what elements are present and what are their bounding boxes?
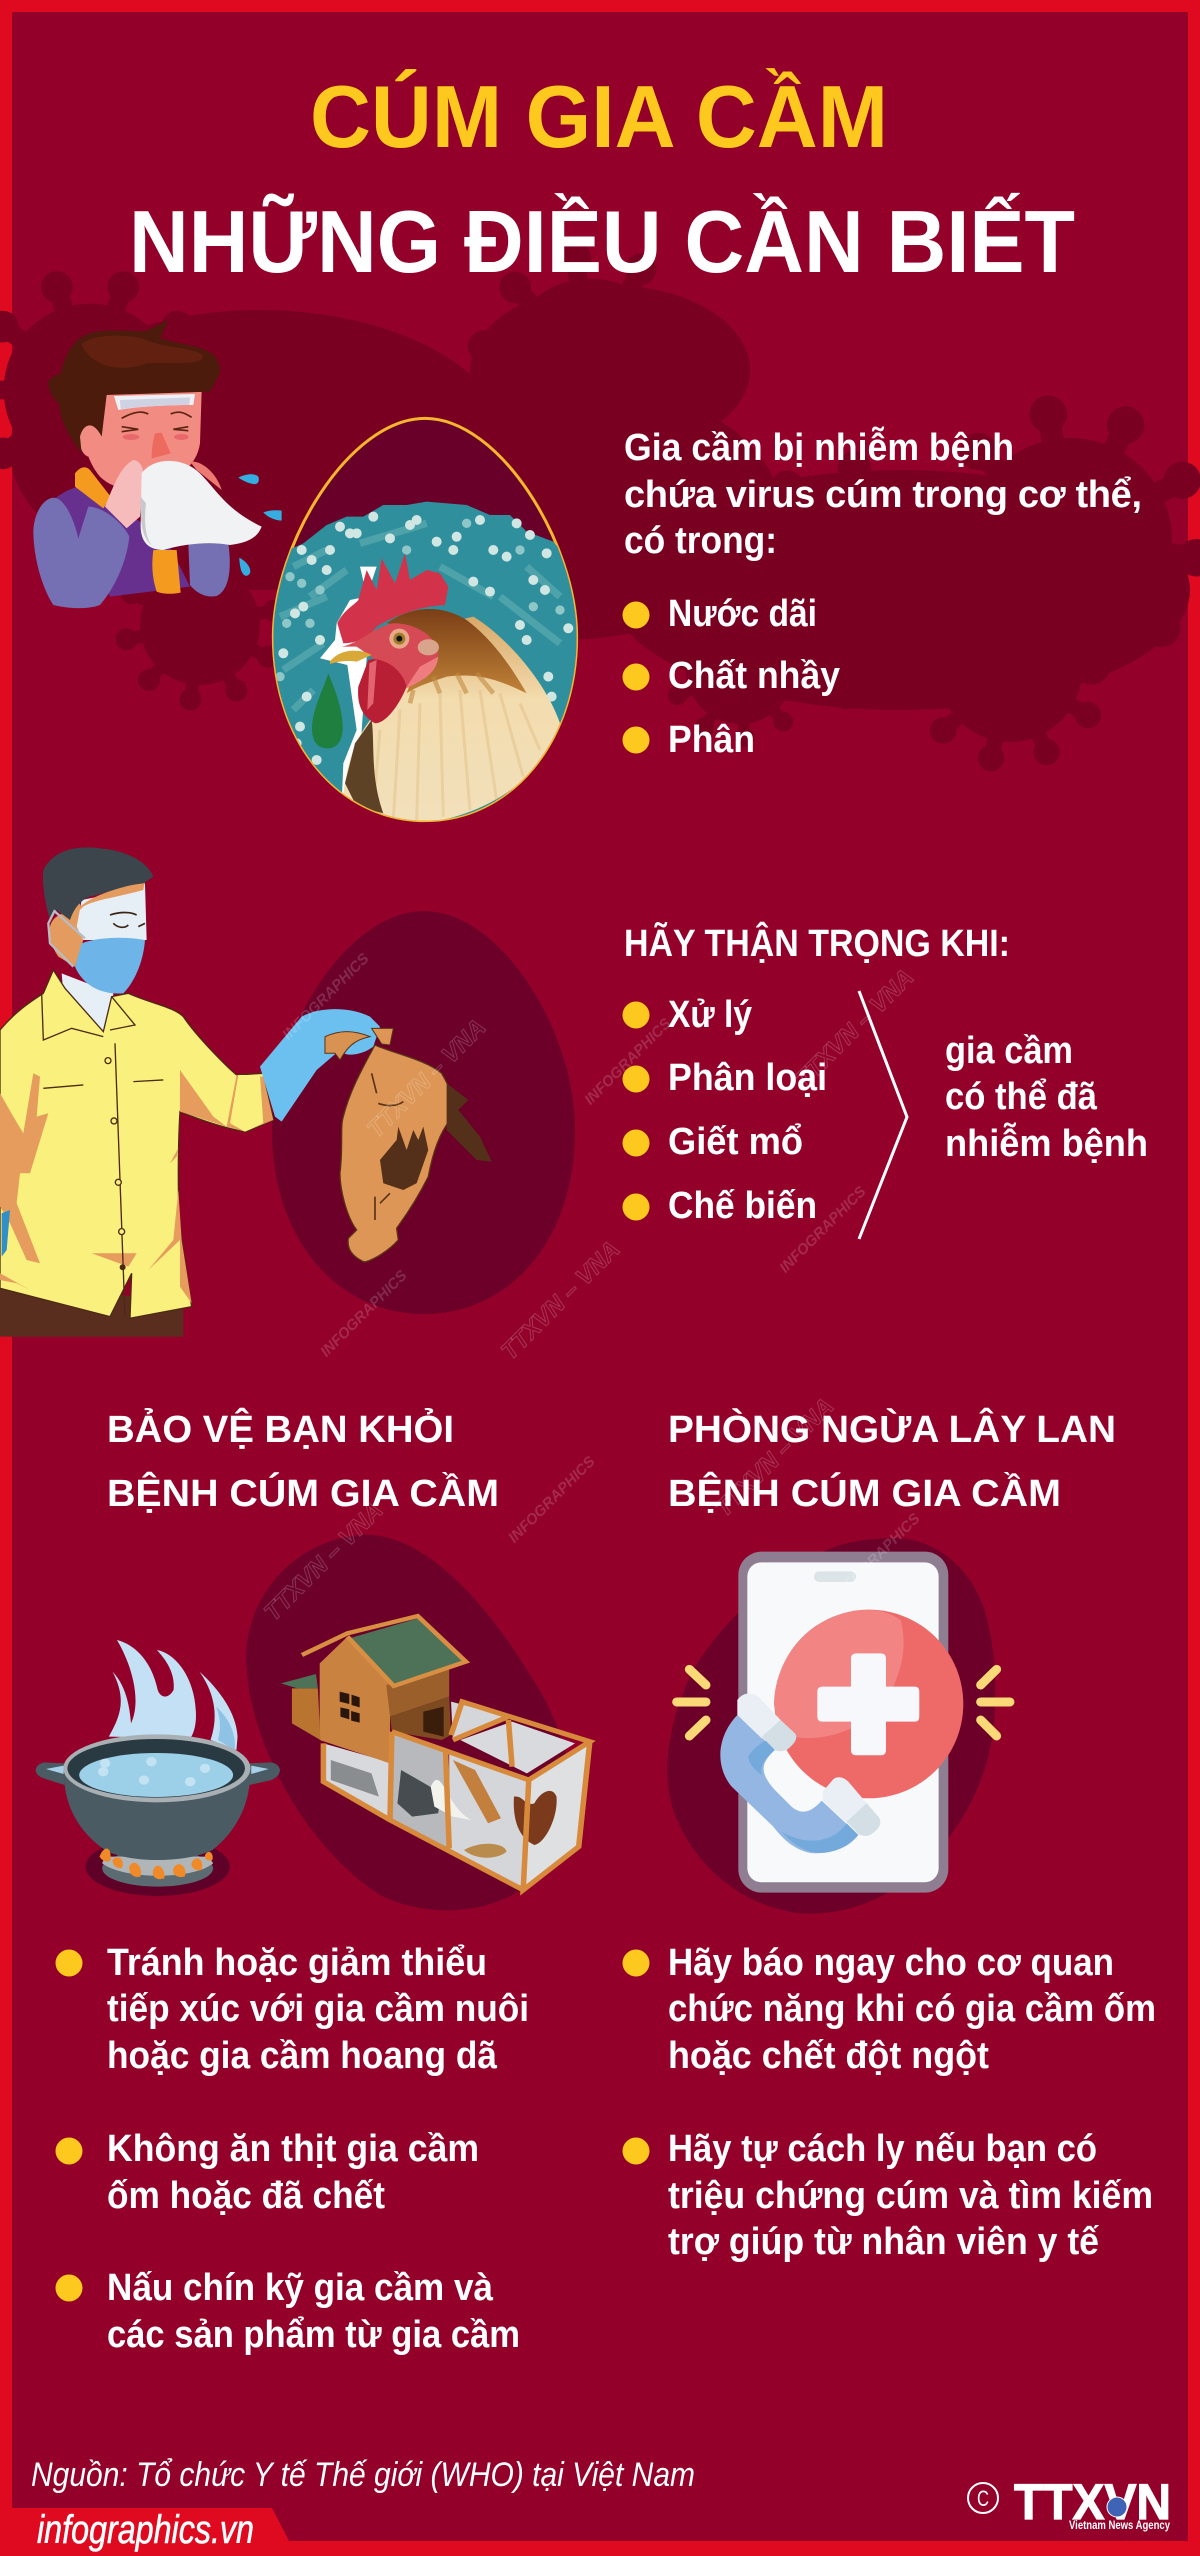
heading: prevent spread: BỆNH CÚM GIA CẦM <box>668 1471 1061 1515</box>
icon: chicken coop <box>281 1616 590 1890</box>
bullets <box>622 1002 650 1028</box>
egg backdrop and phone icon <box>667 1538 1010 1914</box>
watermarks: TTXVN – VNA <box>259 1497 388 1626</box>
panel: infected chicken in egg <box>270 418 585 823</box>
rooster photo illustration <box>270 502 585 823</box>
watermarks: INFOGRAPHICS <box>279 950 372 1043</box>
watermarks: TTXVN – VNA <box>790 964 919 1093</box>
background virus pattern <box>0 245 1200 789</box>
list: prevent spread: triệu chứng cúm và tìm kiếm <box>668 2175 1153 2217</box>
text block: infected poultry: Nước dãi <box>668 593 817 635</box>
watermarks <box>259 950 923 1626</box>
heading: protect yourself: BẢO VỆ BẠN KHỎI <box>107 1407 454 1451</box>
list: prevent spread: Hãy báo ngay cho cơ quan <box>668 1942 1114 1984</box>
globe <box>1107 2497 1127 2517</box>
watermarks: INFOGRAPHICS <box>581 1015 674 1108</box>
list: prevent spread: chức năng khi có gia cầm ốm <box>668 1988 1156 2030</box>
heading: prevent spread: PHÒNG NGỪA LÂY LAN <box>668 1407 1116 1451</box>
watermarks: INFOGRAPHICS <box>317 1267 410 1360</box>
list: protect yourself: hoặc gia cầm hoang dã <box>107 2035 498 2077</box>
list: protect yourself: các sản phẩm từ gia cầm <box>107 2314 520 2356</box>
text block: caution: Xử lý <box>668 994 752 1036</box>
bullets <box>622 602 650 628</box>
heading: protect yourself <box>107 1407 499 1515</box>
text block: caution <box>622 921 1148 1239</box>
egg outline <box>273 418 577 821</box>
list: prevent spread: trợ giúp từ nhân viên y tế <box>668 2221 1100 2263</box>
list: protect yourself <box>56 1942 529 2356</box>
list: protect yourself: Nấu chín kỹ gia cầm và <box>107 2267 494 2309</box>
text block: caution: Phân loại <box>668 1057 827 1099</box>
watermarks: INFOGRAPHICS <box>776 1183 869 1276</box>
source note: Nguồn: Tổ chức Y tế Thế giới (WHO) tại Việt Nam <box>31 2456 695 2494</box>
list: prevent spread <box>622 1942 1156 2263</box>
text block: infected poultry <box>622 425 1142 761</box>
title line 2: NHỮNG ĐIỀU CẦN BIẾT <box>129 192 1075 291</box>
list: protect yourself: ốm hoặc đã chết <box>107 2175 385 2217</box>
wordmark: TTXVN <box>1014 2474 1171 2530</box>
egg backdrop: caution section <box>272 911 575 1314</box>
text block: infected poultry: Chất nhầy <box>668 655 840 697</box>
logo: TTXVN <box>968 2474 1171 2532</box>
list: protect yourself: Tránh hoặc giảm thiểu <box>107 1942 487 1984</box>
text block: infected poultry: có trong: <box>624 520 777 562</box>
intro text: Gia cầm bị nhiễm bệnh <box>624 425 1014 469</box>
list: protect yourself: tiếp xúc với gia cầm nuôi <box>107 1988 529 2030</box>
logo: TTXVN: C <box>977 2486 989 2511</box>
heading: prevent spread <box>668 1407 1116 1515</box>
heading: HÃY THẬN TRỌNG KHI: <box>624 921 1010 965</box>
list: prevent spread: Hãy tự cách ly nếu bạn có <box>668 2128 1097 2170</box>
chevron <box>859 991 907 1239</box>
title <box>129 67 1075 291</box>
watermarks: TTXVN – VNA <box>496 1236 625 1365</box>
list: protect yourself: Không ăn thịt gia cầm <box>107 2128 479 2170</box>
watermarks: TTXVN – VNA <box>710 1393 839 1522</box>
text block: caution: Giết mổ <box>668 1121 803 1163</box>
icon: man in mask holding dead chicken <box>0 847 492 1337</box>
title line 1: CÚM GIA CẦM <box>310 67 888 166</box>
watermarks: TTXVN – VNA <box>362 1014 491 1143</box>
icon: handset <box>720 1694 880 1853</box>
text block: caution: có thể đã <box>945 1076 1098 1118</box>
icon: medical cross bubble <box>774 1610 963 1798</box>
tagline: Vietnam News Agency <box>1069 2520 1170 2532</box>
chevron target text: gia cầm <box>945 1030 1073 1072</box>
website tab <box>0 2508 289 2541</box>
watermarks: INFOGRAPHICS <box>505 1453 598 1546</box>
text block: infected poultry: Phân <box>668 719 755 761</box>
icon: boiling pot <box>36 1640 280 1896</box>
icon: phone <box>738 1552 948 1893</box>
text block: infected poultry: chứa virus cúm trong cơ thể, <box>624 474 1142 516</box>
copyright mark <box>968 2483 998 2513</box>
icon: ring sparks <box>677 1669 1010 1736</box>
text block: caution: Chế biến <box>668 1185 817 1227</box>
watermarks: INFOGRAPHICS <box>830 1510 923 1603</box>
heading: protect yourself: BỆNH CÚM GIA CẦM <box>107 1471 499 1515</box>
egg backdrop: coop <box>246 1535 572 1910</box>
list: prevent spread: hoặc chết đột ngột <box>668 2035 989 2077</box>
text block: caution: nhiễm bệnh <box>945 1121 1148 1165</box>
website label: infographics.vn <box>37 2508 254 2552</box>
icon: sneezing man <box>33 320 282 608</box>
